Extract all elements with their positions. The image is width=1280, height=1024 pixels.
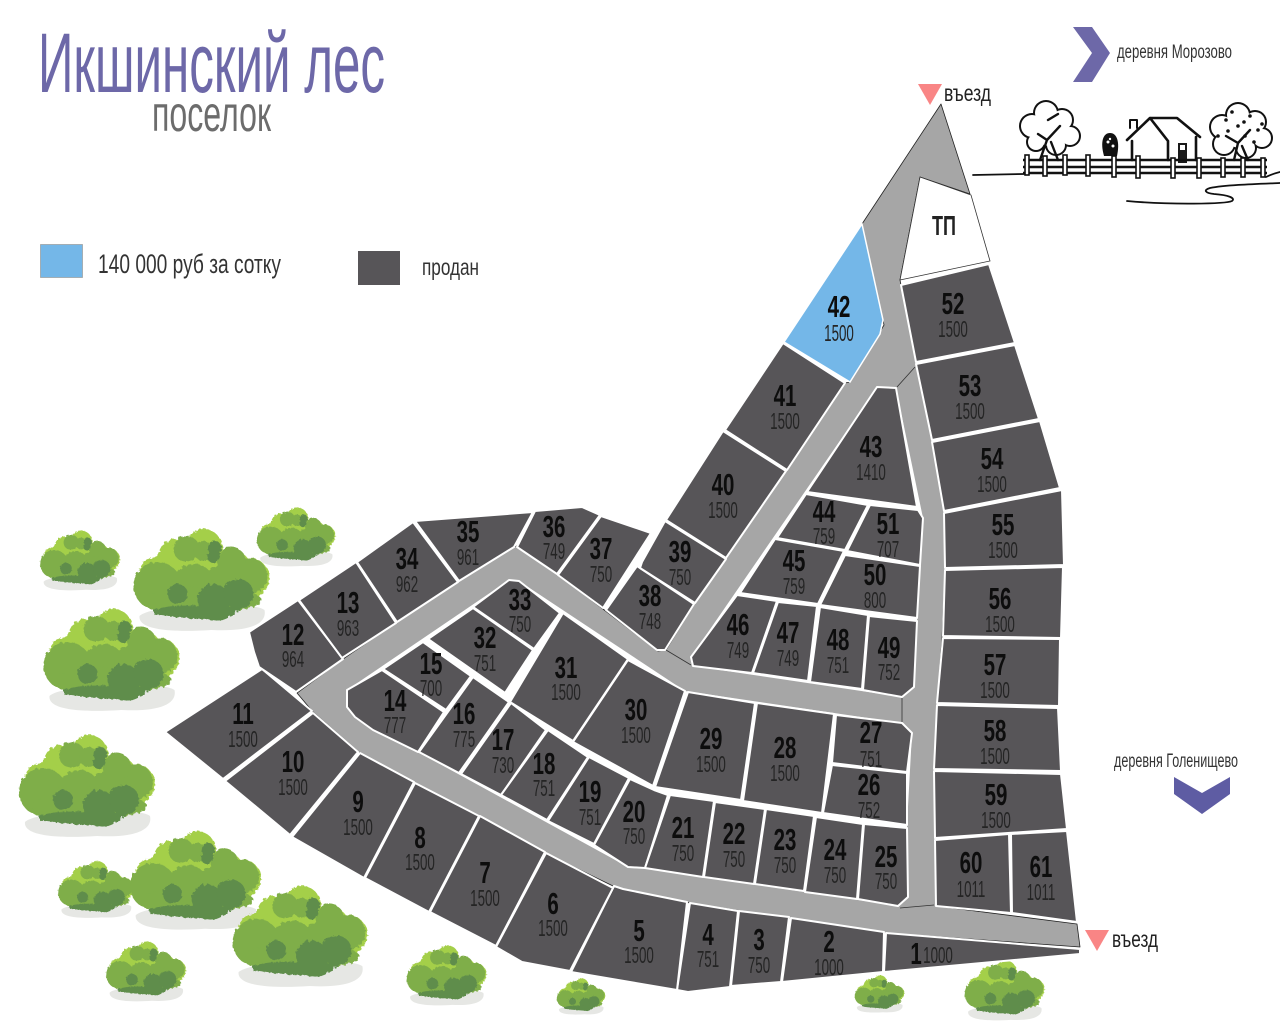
bush 7 — [130, 831, 261, 930]
plot 52: 1500 — [938, 316, 968, 342]
bush 2 — [134, 529, 270, 631]
plot 50 — [820, 555, 920, 618]
plot 53: 53 — [959, 368, 981, 403]
subtitle: поселок — [152, 86, 272, 142]
plot 20 — [594, 779, 668, 868]
plot 56: 1500 — [985, 611, 1015, 637]
plot 4: 4 — [702, 917, 714, 952]
direction: village Morozovo — [1073, 27, 1232, 82]
bush 12 — [855, 975, 904, 1013]
plot 20: 20 — [623, 794, 645, 829]
plot 23: 750 — [774, 852, 796, 878]
plot 47: 749 — [777, 645, 799, 671]
plot 52: 52 — [942, 286, 964, 321]
plot 6: 6 — [547, 886, 559, 921]
plot 6: 1500 — [538, 915, 568, 941]
plot 14 — [347, 670, 444, 752]
plot 45: 45 — [783, 543, 805, 578]
plot 58 — [934, 705, 1061, 771]
island underlay east — [691, 387, 923, 697]
plot 8: 8 — [414, 820, 426, 855]
substation TP — [900, 177, 990, 280]
plot 9: 9 — [352, 784, 364, 819]
plot 20: 750 — [623, 823, 645, 849]
plot 14: 777 — [384, 712, 406, 738]
plot 47 — [753, 602, 817, 681]
entrance top — [918, 80, 991, 106]
plot 51 — [847, 505, 923, 565]
plot 21 — [645, 795, 714, 877]
plot 51: 51 — [877, 506, 899, 541]
plot 16: 16 — [453, 696, 475, 731]
plot 59 — [934, 771, 1067, 838]
plot 14: 14 — [384, 683, 407, 718]
plot 50: 50 — [864, 557, 886, 592]
plot 17: 17 — [492, 722, 514, 757]
bush 10 — [407, 946, 486, 1005]
legend: price per sotka: 140 000 руб за сотку — [98, 249, 281, 279]
plot 18 — [501, 730, 588, 820]
plot 39: 39 — [669, 534, 691, 569]
entrance bottom — [1085, 926, 1158, 952]
plot 53 — [916, 345, 1039, 440]
plot 30 — [573, 660, 685, 786]
plot 58: 1500 — [980, 743, 1010, 769]
plot 49: 49 — [878, 630, 900, 665]
plot 43: 1410 — [856, 459, 886, 485]
plot 37: 37 — [590, 531, 612, 566]
plot 49: 752 — [878, 659, 900, 685]
plot 26 — [823, 765, 907, 825]
plot 21: 750 — [672, 840, 694, 866]
plot 5 — [571, 886, 687, 990]
plot 46 — [691, 595, 777, 673]
plot 36: 36 — [543, 509, 565, 544]
plot 42 available — [784, 224, 883, 382]
plot 41: 1500 — [770, 408, 800, 434]
plot 19: 19 — [579, 774, 601, 809]
plot 5: 1500 — [624, 942, 654, 968]
plot 8: 1500 — [405, 849, 435, 875]
plot 54: 54 — [981, 441, 1004, 476]
bush 5 — [19, 735, 155, 837]
plot 12: 12 — [282, 617, 304, 652]
plot 44 — [777, 494, 868, 550]
plot 46: 749 — [727, 637, 749, 663]
plot 54 — [932, 421, 1060, 511]
plot 43 — [807, 387, 917, 507]
plot 42 available: 42 — [828, 289, 850, 324]
plot 27 — [832, 715, 912, 772]
plot 26: 26 — [858, 767, 880, 802]
title: Икшинский лес — [38, 16, 385, 110]
plot 34: 34 — [396, 541, 419, 576]
plot 6 — [496, 853, 613, 971]
plot 47: 47 — [777, 615, 799, 650]
plot 28: 28 — [774, 730, 796, 765]
plot 41 — [725, 343, 845, 470]
plot 10 — [225, 713, 358, 835]
plot 10: 10 — [282, 744, 304, 779]
plot 30: 30 — [625, 692, 647, 727]
plot 9 — [292, 753, 414, 878]
plot 61: 61 — [1030, 849, 1052, 884]
plot 36: 749 — [543, 538, 565, 564]
plot 27: 27 — [860, 715, 882, 750]
plot 19 — [548, 757, 629, 844]
plot 59: 59 — [985, 777, 1007, 812]
plot 7: 7 — [479, 855, 491, 890]
plot 25 — [858, 824, 908, 906]
plot 26: 752 — [858, 797, 880, 823]
plot 13: 13 — [337, 585, 359, 620]
plot 31: 31 — [555, 650, 577, 685]
plot 35: 35 — [457, 514, 479, 549]
plot 55: 1500 — [988, 537, 1018, 563]
plot 11 — [165, 669, 312, 779]
plot 36 — [517, 507, 600, 574]
island underlay west — [347, 580, 912, 906]
plot 3: 750 — [748, 952, 770, 978]
plot 61 — [1011, 831, 1077, 922]
plot 56 — [943, 567, 1063, 638]
direction: village Morozovo: деревня Морозово — [1117, 42, 1232, 63]
bush 9 — [106, 942, 186, 1001]
plot 22: 22 — [723, 816, 745, 851]
direction: village Golenishchevo — [1114, 751, 1238, 814]
plot 43: 43 — [860, 429, 882, 464]
plot 33: 750 — [509, 611, 531, 637]
plot 11: 11 — [232, 696, 254, 731]
plot 58: 58 — [984, 713, 1006, 748]
plot 32 — [428, 608, 533, 693]
bush 6 — [58, 861, 134, 918]
plot 2: 1000 — [814, 954, 844, 980]
plot 24: 750 — [824, 862, 846, 888]
plot 10: 1500 — [278, 774, 308, 800]
plot 12 — [249, 600, 343, 692]
plot 54: 1500 — [977, 471, 1007, 497]
plot 11: 1500 — [228, 726, 258, 752]
plot 5: 5 — [633, 913, 645, 948]
plot 3: 3 — [753, 922, 765, 957]
plot 29: 1500 — [696, 751, 726, 777]
road network — [297, 104, 1080, 947]
plot 39 — [640, 521, 726, 603]
plot 25: 750 — [875, 868, 897, 894]
plot 44: 44 — [813, 494, 836, 529]
plot 38 — [606, 566, 694, 650]
plot 60: 60 — [960, 845, 982, 880]
plot 21: 21 — [672, 810, 694, 845]
plot 38: 38 — [639, 578, 661, 613]
plot 57: 57 — [984, 647, 1006, 682]
plot 15 — [383, 642, 471, 710]
plot 13 — [299, 562, 396, 658]
plot 18: 18 — [533, 746, 555, 781]
plot 61: 1011 — [1027, 879, 1055, 905]
plot 16 — [419, 677, 509, 773]
plot 23 — [755, 809, 814, 891]
plot 57 — [937, 638, 1060, 706]
plot 15: 15 — [420, 646, 442, 681]
plot 13: 963 — [337, 615, 359, 641]
plot 60: 1011 — [957, 876, 985, 902]
plot 41: 41 — [774, 378, 796, 413]
plot 57: 1500 — [980, 677, 1010, 703]
plot 34: 962 — [396, 571, 418, 597]
plot 25: 25 — [875, 839, 897, 874]
plot 35: 961 — [457, 544, 479, 570]
plot 34 — [357, 522, 458, 622]
plot 19: 751 — [579, 804, 601, 830]
plot 48: 48 — [827, 622, 849, 657]
plot 15: 700 — [420, 675, 442, 701]
plot 1: 1000 — [923, 942, 953, 968]
plot 4: 751 — [697, 946, 719, 972]
plot 59: 1500 — [981, 807, 1011, 833]
plots — [165, 177, 1080, 992]
plot 32: 751 — [474, 650, 496, 676]
plot 32: 32 — [474, 620, 496, 655]
plot 31 — [510, 613, 628, 741]
plot 52 — [901, 264, 1015, 362]
plot 37: 750 — [590, 561, 612, 587]
plot 45: 759 — [783, 573, 805, 599]
plot 39: 750 — [669, 564, 691, 590]
plot 22: 750 — [723, 846, 745, 872]
bush 1 — [40, 531, 120, 590]
plot 7: 1500 — [470, 885, 500, 911]
plot 24: 24 — [824, 832, 847, 867]
plot 37 — [558, 516, 651, 608]
plot 29: 29 — [700, 721, 722, 756]
plot 44: 759 — [813, 523, 835, 549]
plot 1: 1 — [910, 936, 922, 971]
plot 4 — [677, 903, 738, 992]
legend: sold — [358, 251, 479, 285]
substation TP: ТП — [932, 210, 956, 241]
plot 33 — [473, 580, 560, 649]
bush 8 — [233, 886, 367, 987]
bush 11 — [557, 978, 605, 1015]
village illustration — [973, 100, 1280, 204]
plot 23: 23 — [774, 822, 796, 857]
plot 60 — [935, 834, 1011, 913]
plot 8 — [365, 783, 479, 912]
legend: sold: продан — [422, 254, 479, 280]
plot 7 — [430, 816, 545, 946]
plot 2 — [782, 918, 884, 982]
plot 17: 730 — [492, 752, 514, 778]
plot 1 — [884, 933, 1080, 972]
plot 31: 1500 — [551, 679, 581, 705]
plot 40: 1500 — [708, 497, 738, 523]
plot 55: 55 — [992, 507, 1014, 542]
plot 35 — [415, 512, 533, 581]
plot 45 — [740, 539, 844, 604]
plot 46: 46 — [727, 607, 749, 642]
bush 13 — [965, 961, 1044, 1020]
entrance bottom: въезд — [1112, 926, 1158, 952]
plot 18: 751 — [533, 775, 555, 801]
plot 28: 1500 — [770, 760, 800, 786]
legend: price per sotka — [40, 244, 281, 279]
plot 42 available: 1500 — [824, 320, 854, 346]
plot 2: 2 — [823, 924, 835, 959]
plot 30: 1500 — [621, 722, 651, 748]
plot 27: 751 — [860, 746, 882, 772]
plot 48 — [810, 607, 868, 689]
plot 53: 1500 — [955, 398, 985, 424]
bush 3 — [257, 508, 335, 566]
plot 9: 1500 — [343, 814, 373, 840]
plot 48: 751 — [827, 652, 849, 678]
plot 55 — [944, 490, 1064, 568]
plot 56: 56 — [989, 581, 1011, 616]
plot 16: 775 — [453, 726, 475, 752]
plot 40 — [666, 431, 786, 558]
plot 17 — [461, 703, 546, 795]
plot 50: 800 — [864, 587, 886, 613]
plot 49 — [863, 616, 917, 697]
bush 4 — [44, 609, 180, 711]
plot 24 — [805, 817, 863, 899]
plot 28 — [743, 703, 834, 813]
entrance top: въезд — [944, 80, 991, 106]
plot 22 — [704, 802, 765, 884]
plot 38: 748 — [639, 608, 661, 634]
plot 33: 33 — [509, 582, 531, 617]
plot 12: 964 — [282, 646, 304, 672]
plot 3 — [731, 911, 789, 986]
plot 29 — [655, 692, 755, 800]
plot 51: 707 — [877, 536, 899, 562]
plot 40: 40 — [712, 467, 734, 502]
